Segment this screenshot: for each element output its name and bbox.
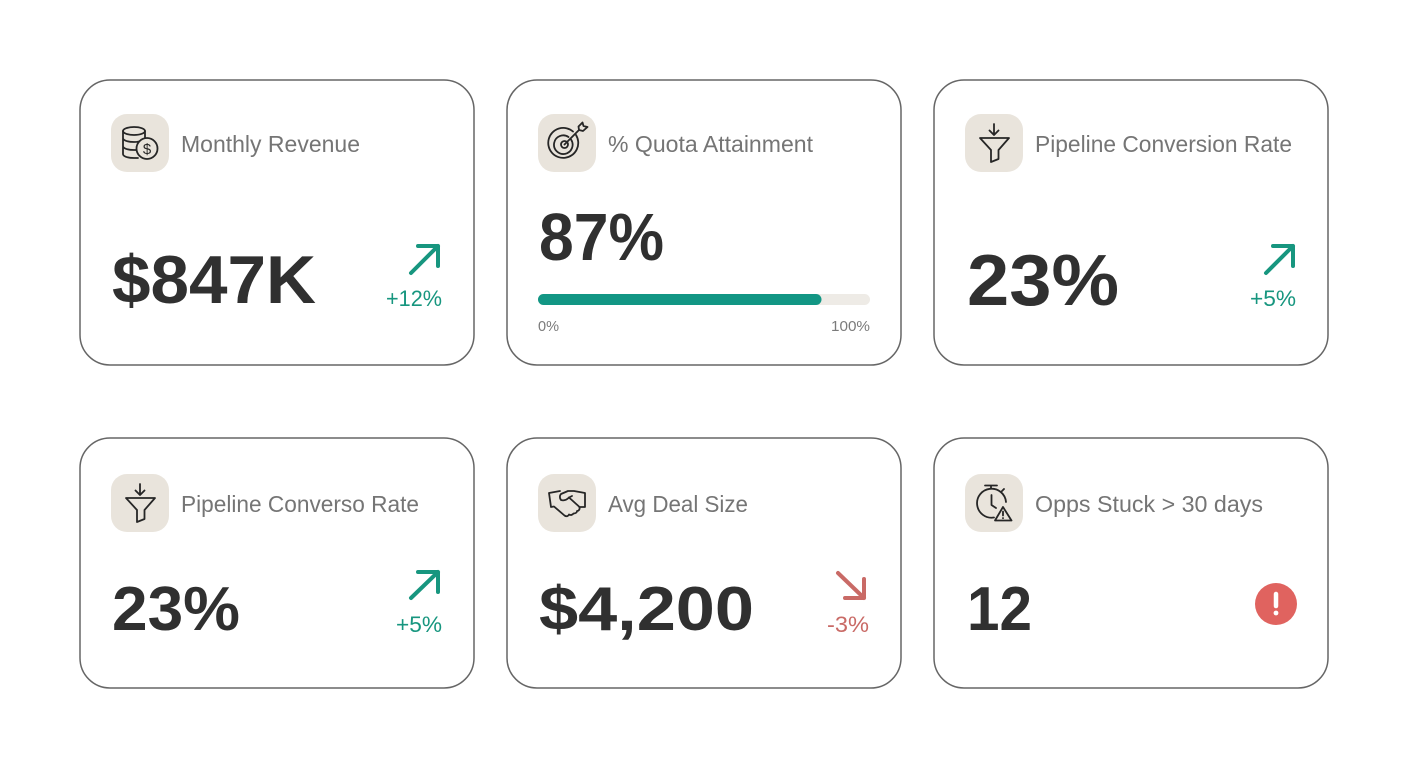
panel: pipeline converso rate xyxy=(80,438,474,688)
progress bar xyxy=(538,294,870,305)
label: Avg Deal Size xyxy=(608,491,748,517)
value: 23% xyxy=(967,241,1119,321)
label: Pipeline Converso Rate xyxy=(181,491,419,517)
panel: average deal size xyxy=(507,438,901,688)
icon: coins xyxy=(111,114,169,172)
value: 87% xyxy=(539,200,664,275)
value: $4,200 xyxy=(539,575,754,644)
icon: funnel xyxy=(965,114,1023,172)
value: 12 xyxy=(967,575,1032,644)
panel: quota attainment xyxy=(507,80,901,365)
change: -3%: -3% xyxy=(827,612,869,637)
change: +5%: +5% xyxy=(1250,286,1296,311)
arrow: up xyxy=(411,246,438,273)
panel: monthly revenue xyxy=(80,80,474,365)
change: +5%: +5% xyxy=(396,612,442,637)
arrow: up xyxy=(1266,246,1293,273)
icon: stopwatch warning xyxy=(965,474,1023,532)
arrow: up xyxy=(411,572,438,598)
panel: pipeline conversion rate xyxy=(934,80,1328,365)
label: Opps Stuck > 30 days xyxy=(1035,491,1263,517)
icon: alert xyxy=(1255,583,1297,625)
value: 23% xyxy=(112,575,240,644)
icon: funnel xyxy=(111,474,169,532)
arrow: down xyxy=(838,573,864,598)
label: Monthly Revenue xyxy=(181,131,360,157)
icon: coins: $ xyxy=(143,141,152,158)
label: % Quota Attainment xyxy=(608,131,813,157)
axis max: 100% xyxy=(831,318,870,335)
change: +12%: +12% xyxy=(386,286,442,311)
axis min: 0% xyxy=(538,318,559,335)
panel: stuck opportunities xyxy=(934,438,1328,688)
icon: target xyxy=(538,114,596,172)
value: $847K xyxy=(112,242,316,318)
icon: handshake xyxy=(538,474,596,532)
label: Pipeline Conversion Rate xyxy=(1035,131,1292,157)
